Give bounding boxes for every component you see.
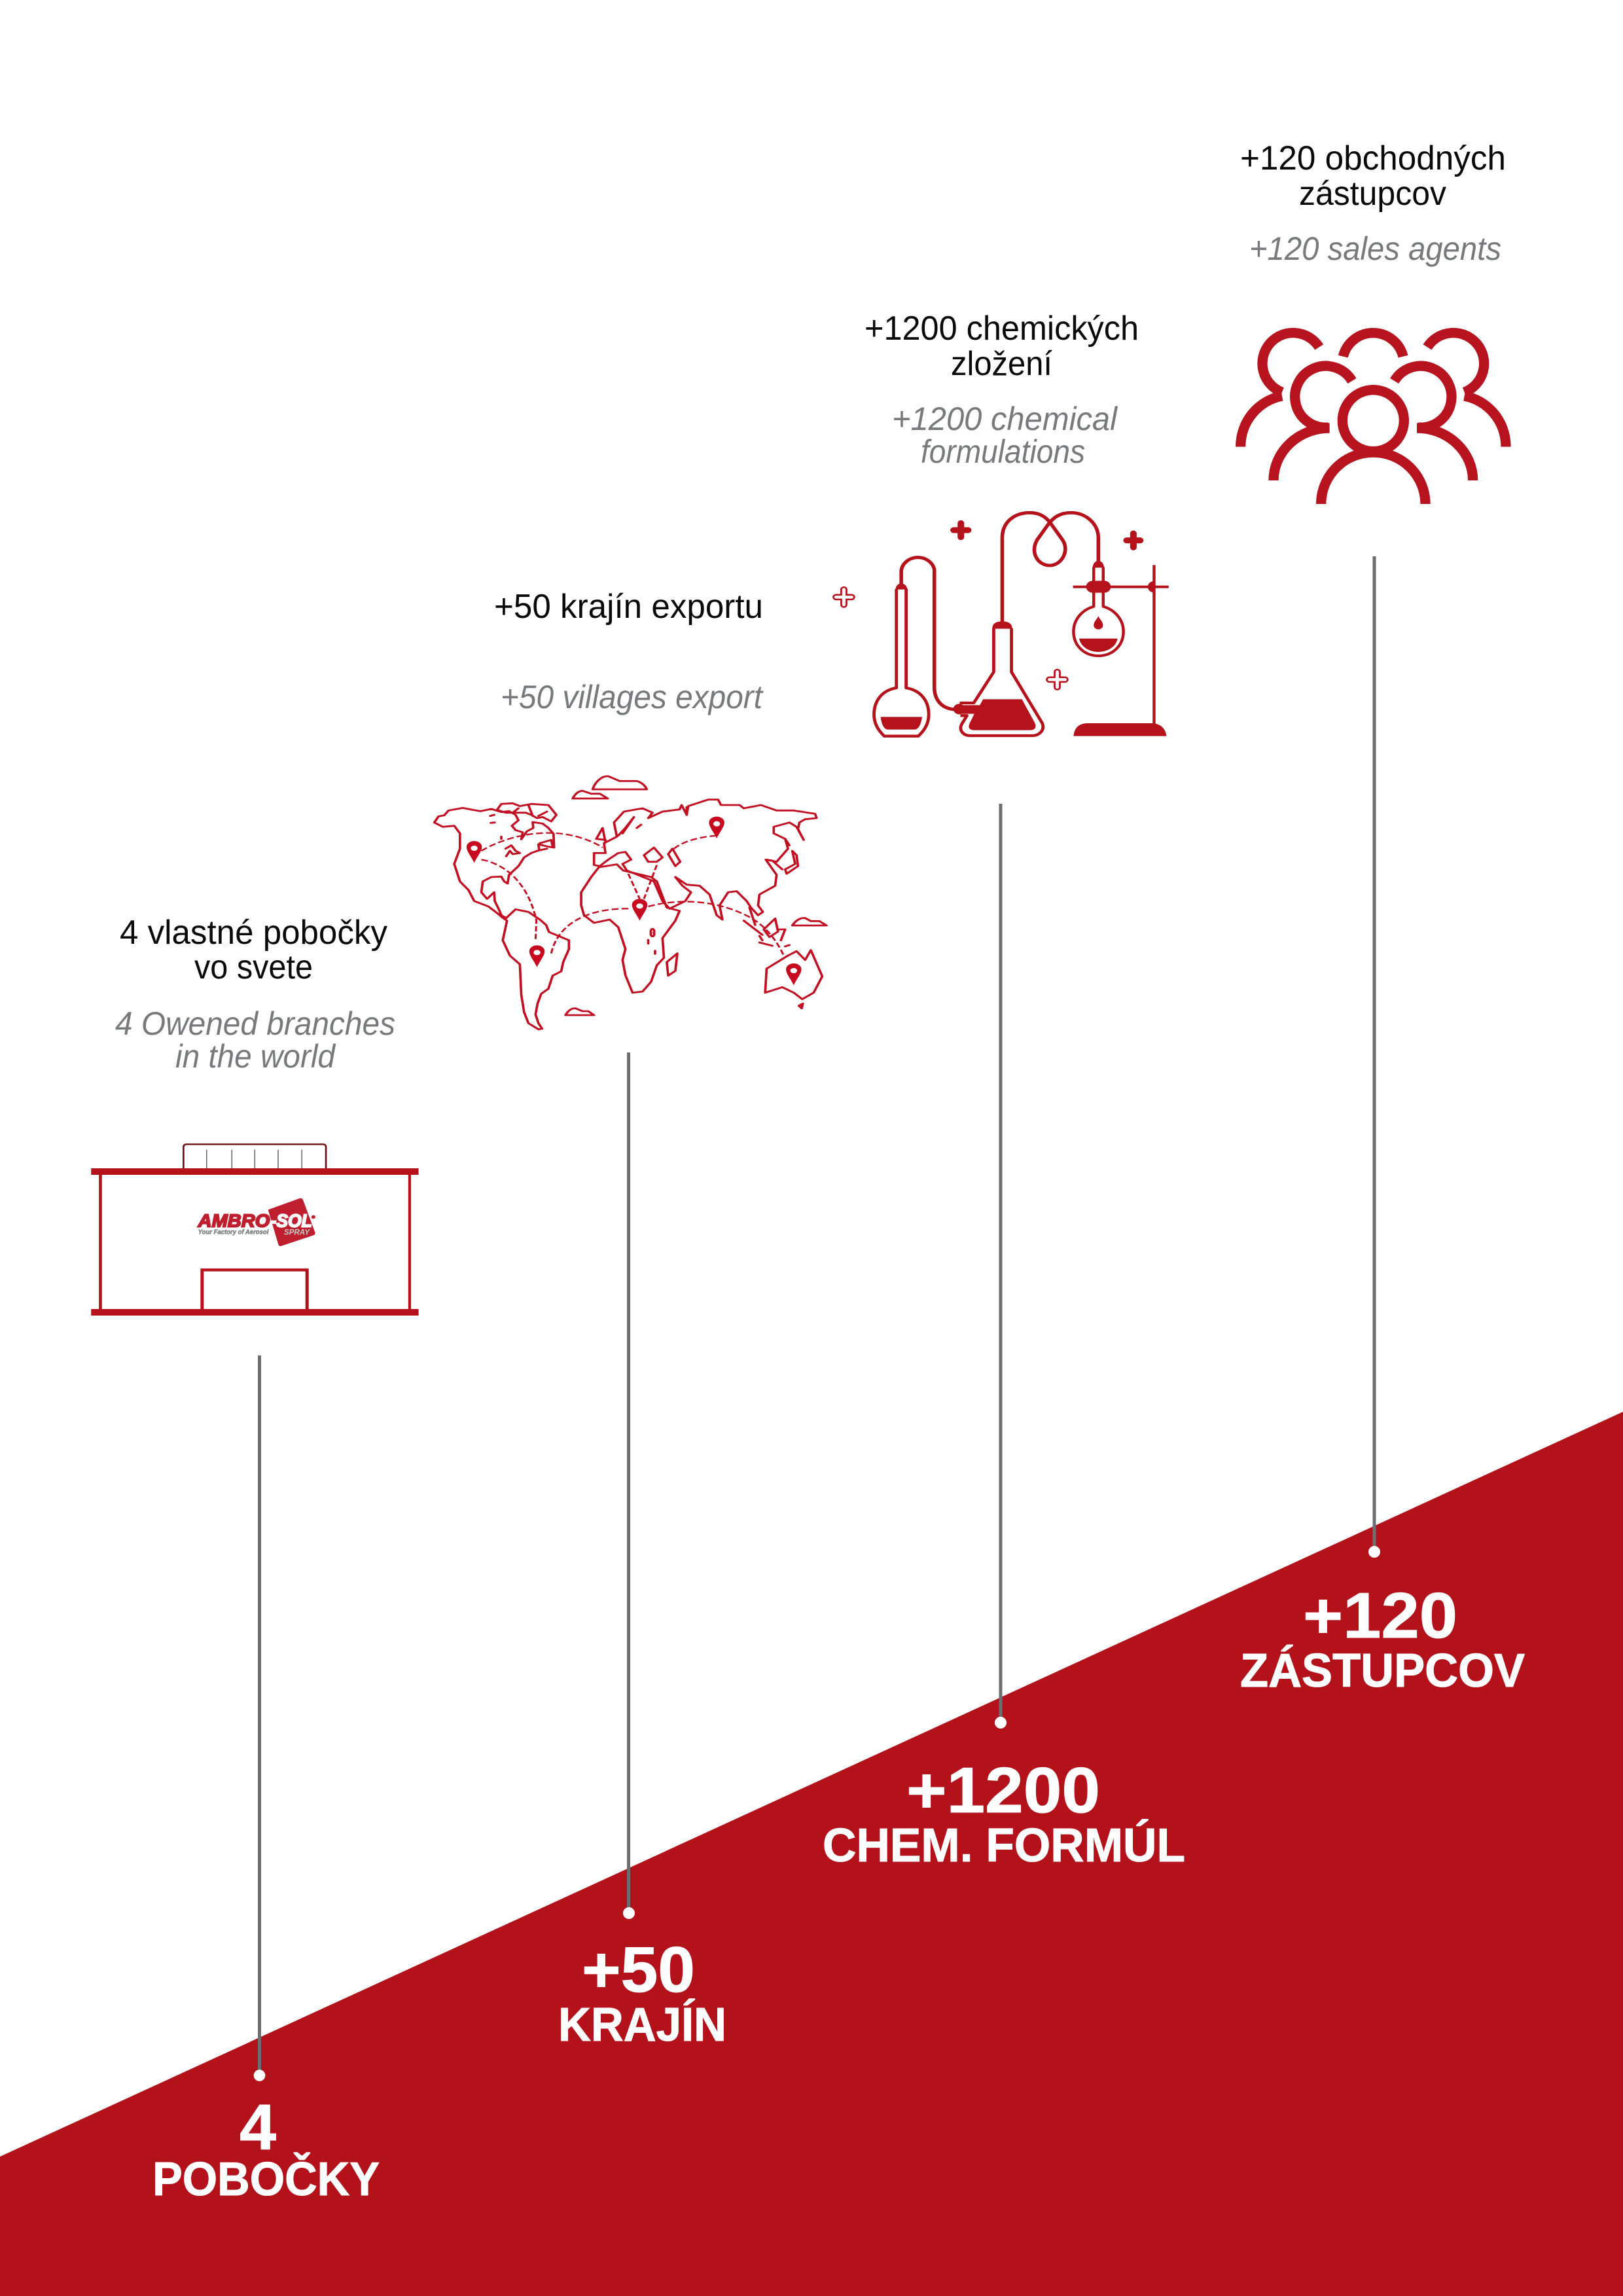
text: 4 branches English: 4 Owened branches — [115, 1005, 395, 1042]
text: agents English: +120 sales agents — [1249, 230, 1501, 267]
panel: chemical formulations — [823, 310, 1185, 1872]
europe details and inland seas — [596, 807, 687, 866]
heading: export Slovak: +50 krajín exportu — [494, 588, 763, 626]
heading: formulations Slovak: zložení — [951, 345, 1053, 383]
eurasia — [594, 800, 817, 920]
text: export English: +50 villages export — [501, 679, 764, 715]
logo: Ambro-Sol: SPRAY — [284, 1227, 310, 1236]
looping tube — [1002, 512, 1098, 622]
heading: 4 branches Slovak: 4 vlastné pobočky — [120, 914, 387, 952]
text: formulations English — [892, 401, 1118, 470]
heading: agents Slovak — [1240, 139, 1506, 213]
stat: +50: +50 — [582, 1933, 695, 2005]
icon: factory building — [91, 1144, 419, 1316]
logo: Ambro-Sol: AMBRO — [198, 1211, 270, 1231]
panel: export countries — [435, 588, 827, 2051]
text: 4 branches English — [115, 1005, 395, 1075]
heading: agents Slovak: zástupcov — [1299, 175, 1446, 213]
text: 4 branches English: in the world — [175, 1038, 336, 1075]
label: CHEM. FORMÚL: CHEM. FORMÚL — [823, 1819, 1185, 1872]
label: KRAJÍN: KRAJÍN — [558, 1999, 726, 2051]
heading: agents Slovak: +120 obchodných — [1240, 139, 1506, 177]
right people — [1395, 333, 1506, 480]
clouds — [565, 776, 827, 1015]
great lakes — [506, 846, 520, 856]
right flask on stand — [1073, 561, 1169, 736]
text: formulations English: formulations — [921, 433, 1085, 470]
south east asia — [744, 908, 789, 946]
connector line with dot — [1368, 556, 1380, 1558]
north and central america — [435, 808, 569, 1030]
location pins — [467, 817, 802, 985]
text: formulations English: +1200 chemical — [892, 401, 1118, 437]
front person — [1321, 390, 1425, 504]
logo: Ambro-Sol: -SOL — [270, 1211, 312, 1231]
back centre person — [1343, 333, 1403, 357]
plus signs — [836, 523, 1140, 687]
left people — [1241, 333, 1352, 480]
heading: 4 branches Slovak: vo svete — [194, 948, 313, 986]
centre flask — [954, 621, 1043, 736]
heading: formulations Slovak — [865, 310, 1139, 383]
connector line with dot — [995, 804, 1007, 1729]
africa — [581, 865, 679, 993]
panel: branches — [91, 914, 419, 2206]
icon: group of people — [1241, 333, 1506, 504]
red diagonal band — [0, 1412, 1623, 2296]
icon: world map with pins — [435, 776, 827, 1030]
tube from left flask — [901, 558, 955, 709]
madagascar and african lakes — [649, 929, 677, 976]
heading: formulations Slovak: +1200 chemických — [865, 310, 1139, 348]
stat: +1200: +1200 — [906, 1754, 1100, 1826]
logo: Ambro-Sol — [198, 1198, 315, 1246]
label: ZÁSTUPCOV: ZÁSTUPCOV — [1240, 1645, 1525, 1697]
route arcs — [482, 833, 784, 956]
stat: +120: +120 — [1303, 1579, 1457, 1651]
panel: sales agents — [1240, 139, 1525, 1697]
icon: laboratory flasks — [836, 512, 1169, 736]
left flask — [874, 583, 929, 736]
east asia islands — [766, 839, 798, 874]
heading: 4 branches Slovak — [120, 914, 387, 986]
label: POBOČKY: POBOČKY — [152, 2153, 380, 2206]
logo: Ambro-Sol: Your Factory of Aerosol — [198, 1229, 269, 1236]
australia — [765, 950, 822, 1009]
arctic islands — [497, 803, 556, 821]
stat: 4: 4 — [240, 2091, 276, 2163]
connector line with dot — [623, 1052, 635, 1919]
connector line with dot — [254, 1355, 265, 2081]
